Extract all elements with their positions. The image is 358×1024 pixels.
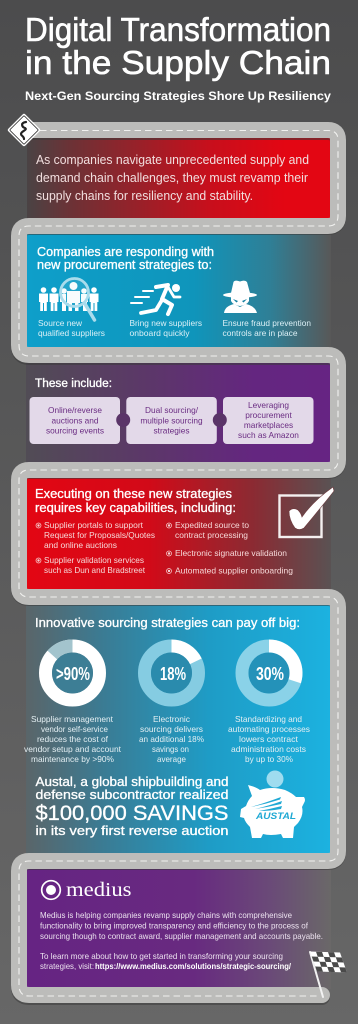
text block: fraud prevention: Ensure fraud prevention (222, 318, 311, 328)
text block: source new qualified suppliers (38, 318, 105, 338)
callout: austal savings: Austal, a global shipbuilding and (36, 775, 229, 789)
panel: key capabilities background (26, 477, 331, 591)
heading: executing on strategies: Executing on these new strategies (35, 486, 232, 501)
text block: bring new suppliers onboard: Bring new suppliers (130, 318, 202, 328)
chart: donut 18 percent: 18% (160, 664, 186, 684)
heading: these include: These include: (35, 378, 112, 390)
logo: medius (42, 879, 132, 901)
icon: fraud spy (223, 281, 257, 313)
text block: bring new suppliers onboard (130, 318, 202, 338)
card: dual sourcing: multiple sourcing (140, 416, 203, 426)
title: in the Supply Chain (25, 44, 331, 81)
icon: suppliers under magnifier (39, 278, 98, 320)
list: capabilities left column: Request for Proposals/Quotes (44, 530, 155, 540)
icon: austal piggy bank: AUSTAL (255, 811, 296, 822)
caption: 18 percent (139, 715, 204, 764)
list: capabilities right column: Expedited source to (175, 520, 249, 530)
text block: medius description: functionality to bring improved transparency and efficiency to the process of (40, 922, 309, 930)
card: procurement marketplaces: such as Amazon (238, 430, 299, 440)
card: dual sourcing: strategies (154, 426, 189, 436)
card: procurement marketplaces: Leveraging (248, 400, 289, 410)
caption: over 90 percent: Supplier management (31, 715, 114, 724)
list: capabilities left column: Supplier portals to support (44, 520, 144, 530)
caption: over 90 percent: vendor setup and account (24, 745, 122, 754)
icon: checkered flag (310, 952, 347, 997)
callout: austal savings: defense subcontractor realized (36, 788, 229, 802)
card: online auctions: auctions and (51, 416, 99, 426)
logo: medius: medius (66, 879, 132, 901)
text block: fraud prevention (222, 318, 311, 338)
text block: medius description (40, 911, 323, 941)
caption: over 90 percent: vendor self-service (41, 725, 108, 734)
text block: medius description: sourcing though to contract award, supplier management and accounts payable. (40, 932, 323, 941)
caption: 18 percent: sourcing delivers (140, 725, 203, 734)
caption: 30 percent: lowers contract (239, 735, 299, 744)
list: capabilities left column: Supplier validation services (44, 555, 144, 565)
card: procurement marketplaces: marketplaces (244, 420, 293, 430)
caption: 30 percent (228, 715, 310, 764)
caption: 30 percent: automating processes (228, 725, 310, 734)
caption: 18 percent: average (157, 755, 186, 764)
text block: learn more: To learn more about how to get started in transforming your sourcing (40, 952, 283, 961)
chart: donut over 90 percent: >90% (56, 664, 90, 684)
winding road (19, 130, 338, 997)
heading: companies are responding (37, 244, 214, 272)
card: procurement marketplaces (223, 397, 314, 444)
text block: source new qualified suppliers: Source new (38, 318, 83, 328)
list: capabilities right column: Automated supplier onboarding (175, 566, 293, 576)
caption: 30 percent: by up to 30% (245, 755, 293, 764)
callout: austal savings: in its very first reverse auction (36, 824, 229, 838)
chart: donut over 90 percent (46, 646, 100, 700)
panel: intro background (27, 136, 330, 220)
callout: austal savings (36, 775, 229, 838)
caption: 18 percent: Electronic (153, 715, 190, 724)
text block: intro (36, 152, 309, 203)
caption: 30 percent: Standardizing and (235, 715, 302, 724)
text block: intro: supply chains for resiliency and stability. (36, 188, 253, 203)
panel: payoff background (26, 603, 331, 855)
list: capabilities left column: and online auctions (44, 540, 117, 550)
title: Digital Transformation (25, 11, 331, 48)
title (25, 11, 331, 81)
caption: 18 percent: an additional 18% (139, 735, 204, 744)
text block: intro: As companies navigate unprecedented supply and (36, 152, 309, 167)
icon: sprinter (131, 284, 180, 314)
list: capabilities right column (166, 520, 293, 576)
caption: over 90 percent: reduces the cost of (37, 735, 109, 744)
text block: intro: demand chain challenges, they must revamp their (36, 170, 309, 185)
text block: learn more (40, 952, 292, 971)
heading: innovative sourcing: Innovative sourcing strategies can pay off big: (35, 616, 300, 630)
subtitle: Next-Gen Sourcing Strategies Shore Up Resiliency (25, 91, 332, 103)
heading: executing on strategies: requires key capabilities, including: (35, 500, 236, 515)
card: dual sourcing: Dual sourcing/ (145, 405, 199, 415)
caption: 18 percent: savings on (152, 745, 189, 754)
caption: over 90 percent: maintenance by >90% (31, 755, 114, 764)
text block: learn more: strategies, visit: (40, 962, 94, 971)
panel: these include background (26, 362, 331, 464)
heading: executing on strategies (35, 486, 236, 515)
card: procurement marketplaces: procurement (245, 410, 292, 420)
heading: companies are responding: Companies are responding with (37, 244, 214, 259)
card: dual sourcing (126, 397, 217, 444)
card: online auctions: Online/reverse (48, 405, 102, 415)
icon: austal piggy bank (240, 770, 305, 838)
list: capabilities left column (36, 520, 155, 575)
list: capabilities left column: such as Dun and Bradstreet (44, 565, 146, 575)
list: capabilities right column: Electronic signature validation (175, 548, 287, 558)
text block: source new qualified suppliers: qualified suppliers (38, 328, 105, 338)
callout: austal savings: $100,000 SAVINGS (36, 801, 228, 825)
chart: donut 30 percent: 30% (256, 664, 284, 684)
chart: donut 18 percent (144, 646, 198, 700)
caption: 30 percent: administration costs (231, 745, 306, 754)
panel: procurement strategies background (26, 233, 331, 349)
text block: bring new suppliers onboard: onboard quickly (130, 328, 190, 338)
icon: checkbox (280, 487, 334, 537)
icon: winding road sign (7, 113, 41, 147)
card: online auctions (30, 397, 120, 444)
text block: learn more: https://www.medius.com/solutions/strategic-sourcing/ (95, 962, 292, 971)
text block: medius description: Medius is helping companies revamp supply chains with comprehensive (40, 911, 292, 920)
panel: medius background (26, 867, 331, 989)
card connectors (116, 413, 227, 427)
card: online auctions: sourcing events (46, 426, 104, 436)
list: capabilities right column: contract processing (175, 530, 248, 540)
heading: companies are responding: new procurement strategies to: (37, 257, 212, 272)
text block: fraud prevention: controls are in place (222, 328, 298, 338)
caption: over 90 percent (24, 715, 122, 764)
chart: donut 30 percent (242, 646, 296, 700)
